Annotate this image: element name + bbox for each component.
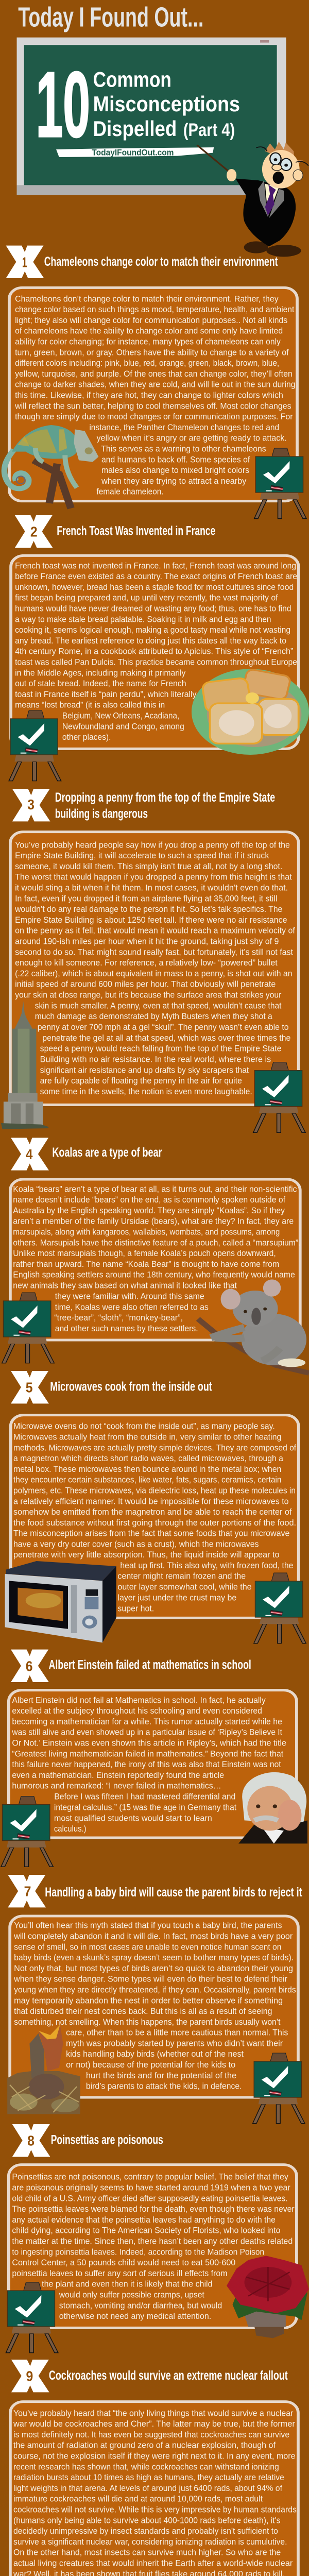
heading 4: Koalas are a type of bear	[52, 1145, 162, 1160]
body text 1: This serves as a warning to other chameleons	[101, 444, 266, 453]
header: title, chalkboard and teacher	[16, 2, 309, 257]
body text 7: or not) because of the potential for the kids to	[66, 2060, 235, 2070]
icon: X 2	[15, 515, 53, 548]
chalkboard heading	[93, 67, 240, 141]
body text 8: would only suffer possible cramps, upset	[59, 2290, 204, 2299]
body text 4: and other such names by these settlers.	[55, 1324, 198, 1333]
section 4: koalas	[1, 1138, 309, 1376]
heading 3	[55, 790, 275, 821]
body text 4	[13, 1184, 301, 1333]
panel background 3	[10, 832, 299, 1105]
body text 8: Control Center, a 50 pounds child would need to eat 500-600	[12, 2258, 235, 2267]
body text 6: most qualified students would start to learn	[54, 1813, 212, 1823]
chalkboard heading: Dispelled	[93, 116, 177, 141]
icon: X 9	[11, 2360, 49, 2392]
image: microwave oven	[5, 1561, 116, 1642]
body text 6: excelled at the subjecy throughout his schooling and even considered	[12, 1706, 262, 1716]
icon: checked chalkboard 5	[254, 1573, 306, 1643]
icon: checked chalkboard 6	[1, 1797, 53, 1867]
heading 2: French Toast Was Invented in France	[57, 523, 215, 538]
chalkboard: 10	[36, 53, 90, 157]
panel background 7	[10, 1916, 298, 2097]
body text 8: the plant and even then it is likely that the child	[42, 2279, 212, 2289]
body text 2: means “lost bread” (it is also called this in	[15, 700, 165, 709]
body text 7: hurt the birds and for the potential of the	[86, 2071, 236, 2080]
section 3: penny	[1, 789, 306, 1133]
body text 8: otherwise not need any medical attention.	[59, 2311, 211, 2321]
body text 1: when they are trying to attract a nearby	[101, 476, 246, 486]
body text 6: even a mathematician. Einstein reportedly found the article	[12, 1770, 224, 1780]
body text 8	[12, 2172, 295, 2321]
body text 2: out of stale bread. Indeed, the name for French	[15, 679, 186, 688]
image: baby birds in nest	[7, 2025, 80, 2114]
body text 3: significant air resistance and up drafts by sky scrapers that	[40, 1065, 249, 1075]
body text 2: Newfoundland and Congo, among	[62, 721, 184, 731]
image: French toast plate	[192, 669, 309, 755]
icon: checked chalkboard 2	[9, 710, 61, 781]
icon: X 8	[12, 2124, 50, 2157]
body text 3: Building with no air resistance. In the real world, where there is	[40, 1054, 271, 1064]
icon: X 1	[6, 246, 44, 278]
chalkboard heading: Misconceptions	[93, 92, 240, 116]
panel background 2	[11, 555, 299, 749]
section 8: poinsettias	[5, 2124, 309, 2353]
body text 9: immature cockroaches will die and at around 10,000 rads, most adult	[13, 2494, 263, 2503]
image: poinsettia plant	[227, 2256, 309, 2338]
section 2: French toast	[8, 515, 309, 781]
icon: X 8: 8	[27, 2133, 35, 2149]
body text 6	[11, 1695, 286, 1834]
panel background 6	[9, 1690, 297, 1838]
icon: X 6: 6	[26, 1658, 33, 1674]
icon: X 4	[11, 1138, 49, 1171]
icon: X 7: 7	[24, 1884, 31, 1900]
image: chameleon	[4, 425, 98, 509]
section 9: cockroaches	[9, 2360, 300, 2576]
icon: checked chalkboard 3	[253, 1062, 305, 1132]
panel background 8	[9, 2165, 297, 2328]
body text 7: bird’s parents to attack the kids, in defence.	[86, 2081, 242, 2091]
body text 2: other places).	[62, 732, 111, 742]
panel background 1	[9, 287, 297, 501]
icon: X 7	[8, 1875, 46, 1907]
icon: X 4: 4	[26, 1147, 33, 1162]
body text 6: humorous and remarked: “I never failed in mathematics…	[12, 1781, 221, 1790]
body text 1: males also change to mixed bright colors	[101, 465, 249, 475]
body text 5: super hot.	[117, 1603, 154, 1613]
section 7: baby birds	[7, 1875, 306, 2124]
image: Empire State Building	[1, 1001, 49, 1129]
image: Einstein portrait	[238, 1772, 307, 1843]
icon: X 2: 2	[30, 524, 38, 540]
body text 5: have a very dry outer cover (such as a crust), which the microwaves	[13, 1539, 259, 1549]
body text 4: time, Koalas were also often referred to as	[55, 1302, 209, 1312]
icon: X 6	[11, 1650, 49, 1682]
teacher cartoon	[197, 142, 308, 257]
body text 3	[14, 840, 296, 1096]
body text 6: calculus.)	[54, 1824, 87, 1834]
icon: checked chalkboard 8	[6, 2282, 58, 2353]
body text 7: kids handling baby birds (whether out of the nest	[66, 2049, 244, 2059]
panel background 5	[11, 1415, 299, 1618]
body text 5	[13, 1421, 297, 1613]
body text 8: stomach, vomiting and/or diarrhea, but would	[59, 2300, 222, 2310]
body text 6: integral calculus.” (15 was the age in Germany that	[54, 1803, 236, 1812]
url swash	[56, 147, 214, 157]
icon: X 5: 5	[26, 1380, 33, 1396]
body text 4: new animals they saw based on what animal it looked like that	[13, 1281, 237, 1290]
heading 8: Poinsettias are poisonous	[51, 2132, 163, 2147]
panel background 9	[10, 2402, 298, 2576]
body text 3: some time in the swells, the notion is even more laughable.	[40, 1087, 252, 1096]
body text 1: female chameleon.	[96, 487, 164, 496]
body text 2: toast in France itself is “pain perdu”, which literally	[15, 689, 197, 699]
body text 9	[13, 2408, 297, 2576]
body text 1: and humans to back off. Some species of	[101, 454, 250, 464]
icon: checked chalkboard 7	[253, 2053, 305, 2124]
body text 6: Before I was fifteen I had mastered differential and	[54, 1792, 235, 1801]
body text 5: center might remain frozen and the	[117, 1571, 246, 1581]
icon: X 3	[12, 789, 50, 821]
chalkboard heading: Common	[93, 67, 171, 92]
body text 8: poinsettia leaves to suffer any sort of serious ill effects from	[12, 2268, 228, 2278]
body text 4: they were familiar with. Around this same	[55, 1291, 204, 1301]
section 6: Einstein	[0, 1650, 307, 1867]
body text 7	[13, 1921, 296, 2091]
panel background 4	[10, 1179, 300, 1340]
section 1: chameleons	[1, 245, 307, 519]
chalkboard heading: (Part 4)	[183, 120, 235, 140]
icon: X 5	[11, 1371, 49, 1403]
url swash: TodayIFoundOut.com	[92, 148, 174, 157]
heading 5: Microwaves cook from the inside out	[50, 1379, 212, 1394]
body text 2: Belgium, New Orleans, Acadiana,	[62, 711, 179, 720]
image: koala on branch	[198, 1279, 309, 1373]
body text 4: “tree-bear”, “sloth”, “monkey-bear”,	[54, 1313, 183, 1323]
heading 3: building is dangerous	[55, 806, 148, 821]
icon: X 1: 1	[22, 255, 27, 270]
body text 2	[15, 561, 297, 742]
icon: checked chalkboard 4	[2, 1293, 54, 1363]
body text 1	[14, 294, 296, 496]
body text 5: outer layer somewhat cool, while the	[117, 1582, 252, 1591]
section 5: microwaves	[5, 1371, 307, 1643]
icon: X 9: 9	[26, 2369, 33, 2384]
body text 5: layer just under the crust may be	[117, 1592, 236, 1602]
body text 2: in the Middle Ages, including making it primarily	[15, 668, 185, 677]
chalkboard	[17, 38, 286, 195]
body text 3: are fully capable of floating the penny in the air for quite	[40, 1076, 242, 1086]
icon: checked chalkboard 1	[254, 448, 306, 519]
icon: X 3: 3	[27, 797, 35, 813]
